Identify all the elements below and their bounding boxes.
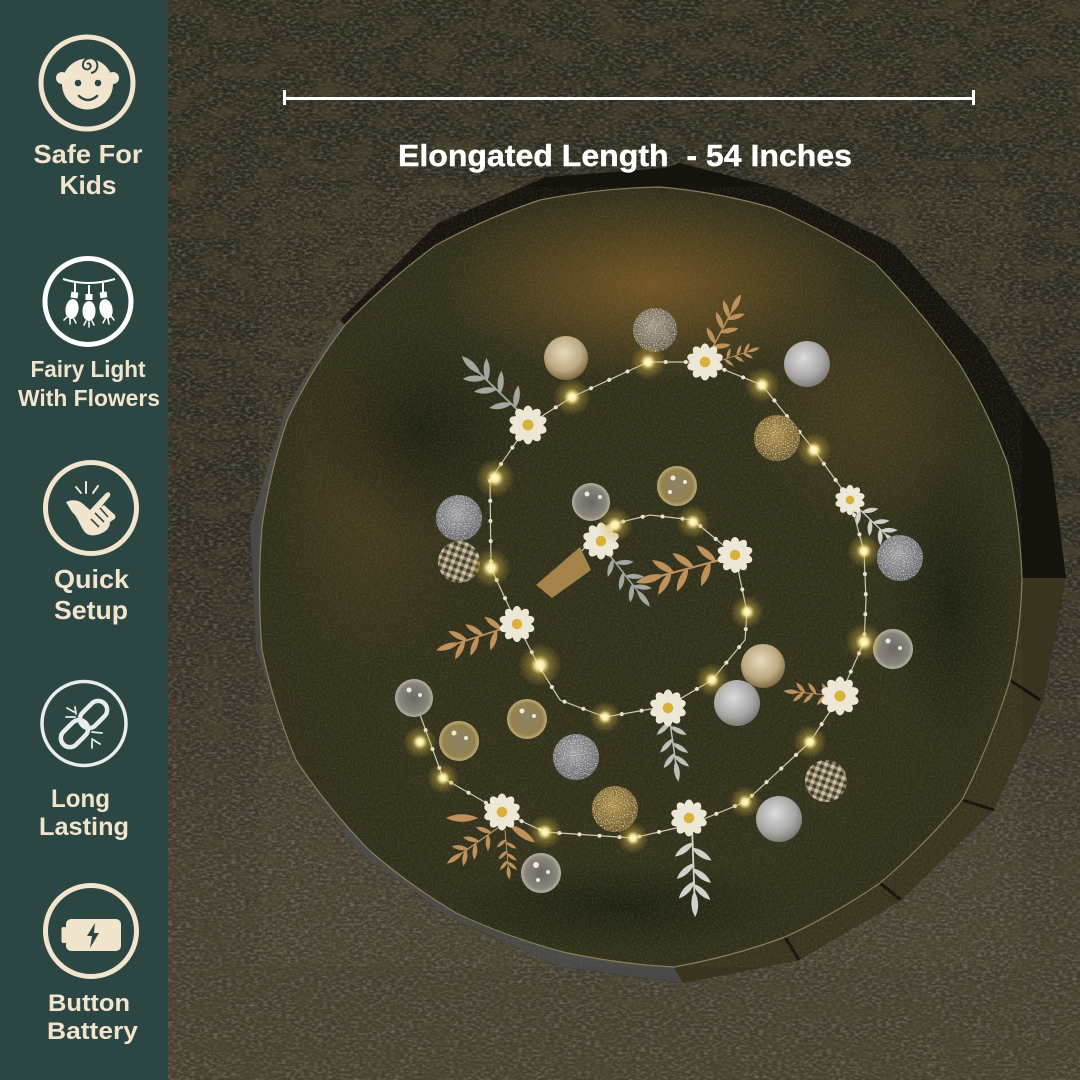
flowers [483,344,866,836]
feature: safe for kids [34,37,142,200]
label: quick setup: Setup [54,595,128,625]
label: safe for kids: Kids [60,170,116,200]
fairy light garland [395,288,923,916]
measurement line [283,90,975,105]
label: quick setup: Quick [54,564,130,594]
cork battery holder [536,547,591,598]
heading: elongated length: Elongated Length - 54 Inches [398,138,852,173]
label: long lasting: Lasting [39,813,129,841]
feature: quick setup [46,462,136,625]
round scalloped tray [250,163,1066,983]
label: safe for kids: Safe For [34,139,142,169]
label: button battery: Button [48,990,130,1017]
feature: fairy light with flowers [18,258,160,411]
icon: battery [46,886,136,976]
feature: long lasting [39,682,129,841]
label: fairy light with flowers: Fairy Light [30,356,146,382]
panel: features sidebar [0,0,168,1080]
label: fairy light with flowers: With Flowers [18,385,160,411]
sprigs of leaves [432,288,907,916]
label: long lasting: Long [51,785,110,813]
icon: snapping hand [46,462,136,554]
LED glows [403,344,883,854]
feature: button battery [46,886,139,1045]
ornament balls [395,308,923,893]
label: button battery: Battery [47,1018,139,1045]
icon: chain link [42,682,126,766]
icon: baby face [41,37,133,129]
light wire with pearls [414,362,866,838]
icon: string lights [45,258,131,344]
